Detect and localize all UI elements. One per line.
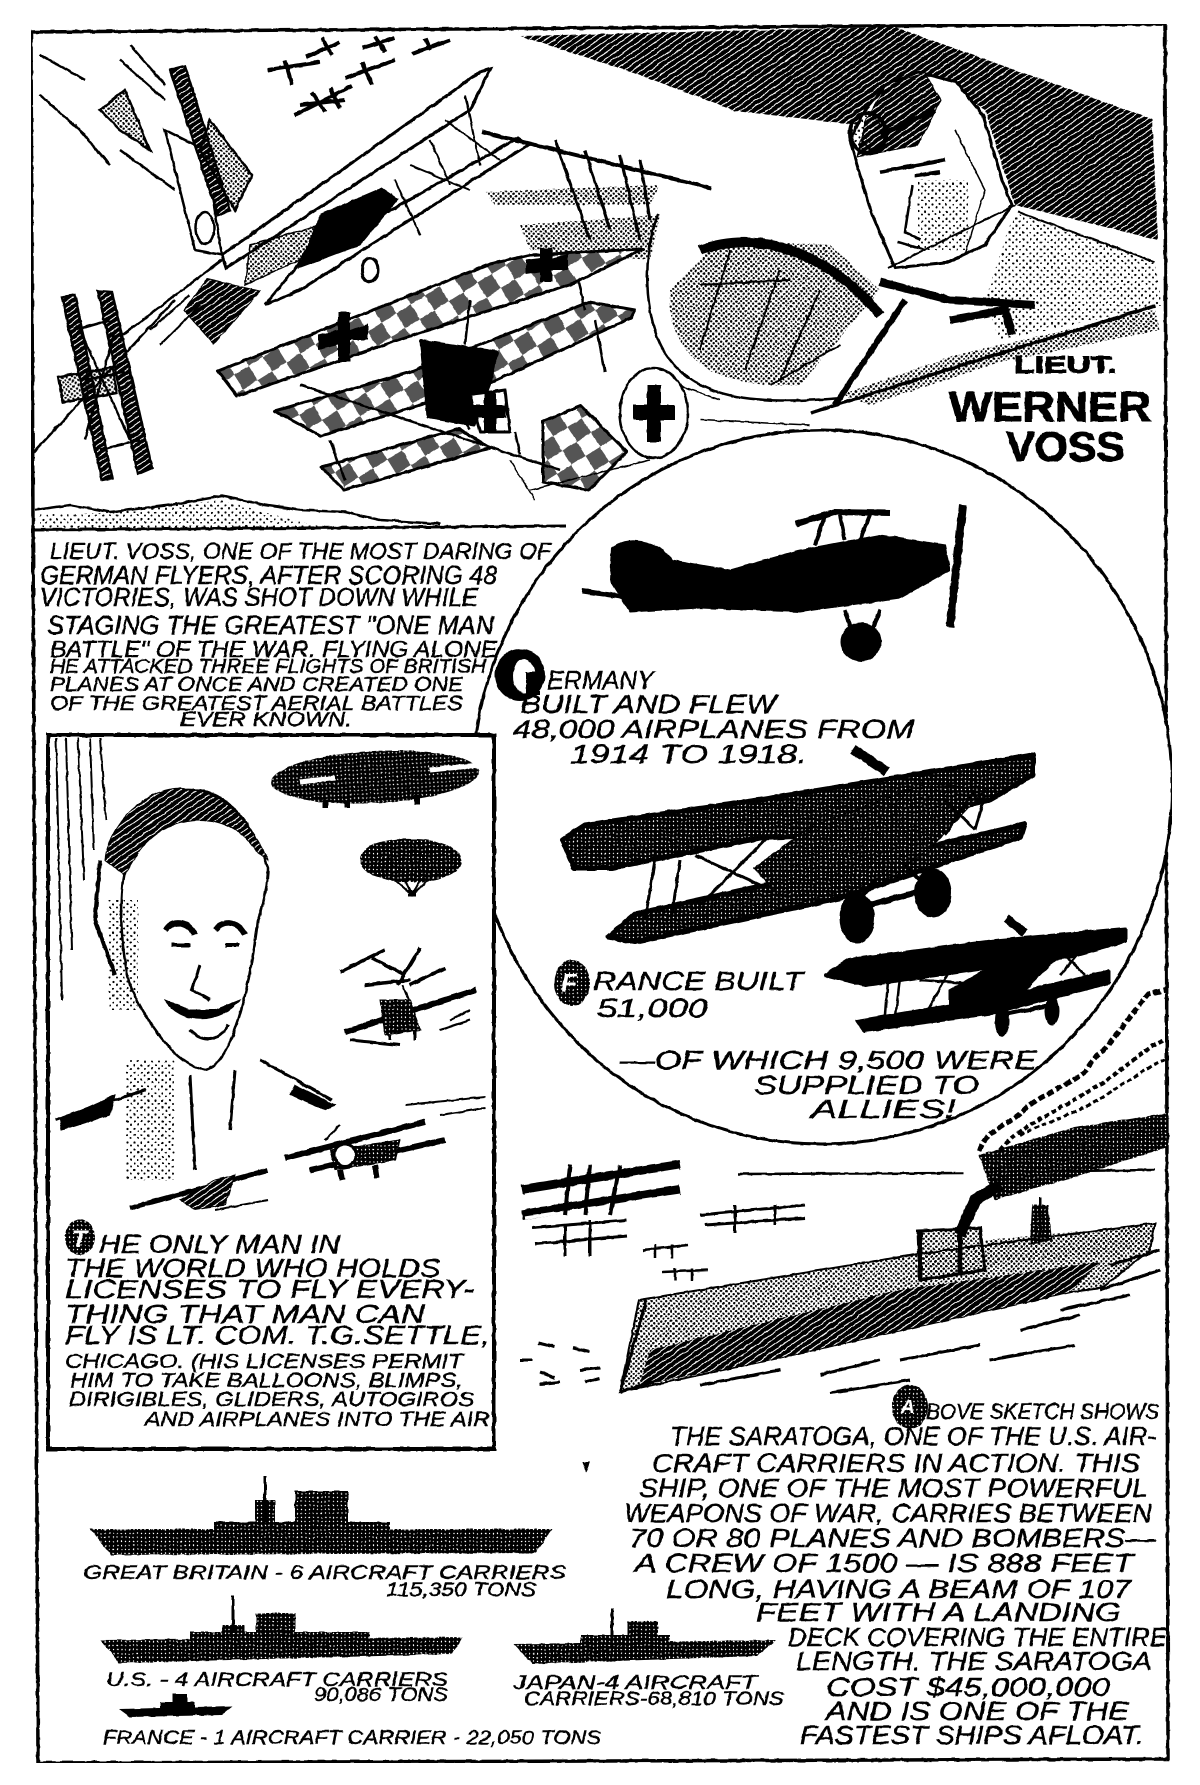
illustration: planes above carrier <box>522 1165 805 1281</box>
text block: Saratoga: COST $45,000,000 <box>826 1672 1111 1702</box>
icon: drop cap A: A <box>900 1397 915 1418</box>
text block: Saratoga: A CREW OF 1500 — IS 888 FEET <box>633 1548 1136 1578</box>
text block: Lieut. Voss biography: PLANES AT ONCE AND CREATED ONE <box>50 674 464 696</box>
horizon lines <box>738 1170 1155 1174</box>
text block: Saratoga: WEAPONS OF WAR, CARRIES BETWEEN <box>624 1498 1152 1528</box>
big circle panel <box>472 430 1172 1144</box>
text block: Germany <box>495 649 914 769</box>
title: Lieut. Werner Voss: VOSS <box>1006 423 1125 470</box>
caption: France: FRANCE - 1 AIRCRAFT CARRIER - 22,050 TONS <box>103 1728 601 1749</box>
text block: Saratoga: FEET WITH A LANDING <box>756 1597 1121 1627</box>
text block: Lieut. Voss biography: GERMAN FLYERS, AFTER SCORING 48 <box>40 560 498 590</box>
text block: Saratoga: LONG, HAVING A BEAM OF 107 <box>666 1574 1133 1604</box>
caption: Great Britain: 115,350 TONS <box>386 1580 536 1601</box>
text block: Lieut. Voss biography <box>40 538 553 731</box>
text block: France: RANCE BUILT <box>593 966 806 996</box>
text block: Saratoga: THE SARATOGA, ONE OF THE U.S. AIR- <box>670 1421 1156 1451</box>
text block: Saratoga: AND IS ONE OF THE <box>824 1696 1130 1726</box>
illustration: curtain <box>56 738 106 1000</box>
text block: France <box>554 960 1038 1124</box>
text block: Settle <box>65 1219 490 1431</box>
title: Lieut. Werner Voss <box>949 352 1151 470</box>
panel: Settle <box>48 735 494 1449</box>
illustration: large diving biplane <box>150 69 711 345</box>
text block: Lieut. Voss biography: HE ATTACKED THREE FLIGHTS OF BRITISH <box>50 656 487 678</box>
illustration: portrait of Settle <box>55 788 335 1180</box>
text block: Settle: THE WORLD WHO HOLDS <box>65 1253 441 1283</box>
silhouette: plane 3 <box>826 918 1125 1036</box>
text block: Saratoga <box>624 1385 1168 1750</box>
text block: Lieut. Voss biography: EVER KNOWN. <box>180 709 352 731</box>
icon: iron cross rudder <box>620 368 688 458</box>
ship silhouette: Great Britain <box>90 1476 552 1555</box>
illustration: mini plane formation <box>268 36 450 115</box>
mark: speck <box>582 1462 590 1472</box>
icon: drop cap A <box>892 1385 928 1429</box>
illustration: blimp <box>270 746 480 808</box>
text block: Settle: AND AIRPLANES INTO THE AIR <box>144 1409 490 1431</box>
illustration: upper left diving plane <box>40 45 252 255</box>
icon: drop cap T: T <box>72 1226 89 1253</box>
text block: Lieut. Voss biography: BATTLE" OF THE WAR. FLYING ALONE <box>50 636 498 662</box>
title: Lieut. Werner Voss: LIEUT. <box>1014 352 1117 379</box>
caption: U.S.: 90,086 TONS <box>314 1685 448 1706</box>
illustration: pilot Werner Voss <box>811 72 1162 413</box>
text block: France: ALLIES! <box>808 1094 956 1124</box>
illustration: wing crosses <box>318 248 568 432</box>
illustration: left vertical biplane <box>34 260 222 480</box>
caption: Japan <box>512 1673 784 1710</box>
illustration: low flying plane <box>130 1170 268 1210</box>
text block: Lieut. Voss biography: STAGING THE GREATEST "ONE MAN <box>47 610 494 640</box>
caption: Great Britain: GREAT BRITAIN - 6 AIRCRAFT CARRIERS <box>83 1563 566 1584</box>
illustration: hills on horizon <box>31 496 566 530</box>
icon: drop cap T <box>65 1219 95 1255</box>
text block: Germany: 1914 TO 1918. <box>570 739 807 769</box>
illustration: balloon <box>360 839 462 896</box>
illustration: wake and waves <box>520 1250 1160 1393</box>
caption: Japan: JAPAN-4 AIRCRAFT <box>512 1673 759 1694</box>
text block: Germany: 48,000 AIRPLANES FROM <box>513 714 914 744</box>
text block: France: —OF WHICH 9,500 WERE <box>619 1045 1038 1075</box>
text block: Lieut. Voss biography: LIEUT. VOSS, ONE OF THE MOST DARING OF <box>50 538 553 564</box>
illustration: aircraft carrier Saratoga <box>620 1197 1155 1392</box>
text block: Lieut. Voss biography: VICTORIES, WAS SHOT DOWN WHILE <box>40 582 479 612</box>
illustration: gray aircraft sketch behind triplane <box>485 140 660 260</box>
caption: Japan: CARRIERS-68,810 TONS <box>524 1689 784 1710</box>
illustration: windshield <box>647 214 880 401</box>
icon: drop cap F <box>554 960 590 1006</box>
text block: Saratoga: CRAFT CARRIERS IN ACTION. THIS <box>652 1448 1141 1478</box>
illustration: dark sky behind pilot <box>520 27 1158 240</box>
text block: Settle: FLY IS LT. COM. T.G.SETTLE, <box>65 1320 490 1350</box>
text block: Settle: HIM TO TAKE BALLOONS, BLIMPS, <box>70 1370 463 1392</box>
ship silhouette: U.S. <box>101 1595 463 1663</box>
text block: Lieut. Voss biography: OF THE GREATEST AERIAL BATTLES <box>50 693 464 715</box>
icon: drop cap G <box>495 649 545 701</box>
text block: Settle: DIRIGIBLES, GLIDERS, AUTOGIROS <box>69 1389 475 1411</box>
text block: Settle: LICENSES TO FLY EVERY- <box>65 1274 474 1304</box>
illustration: small biplane <box>285 1097 485 1180</box>
illustration: checkered triplane <box>218 248 810 500</box>
text block: Settle: THING THAT MAN CAN <box>65 1299 425 1329</box>
illustration: smoke <box>960 990 1168 1235</box>
title: Lieut. Werner Voss: WERNER <box>949 383 1151 430</box>
text block: Settle: CHICAGO. (HIS LICENSES PERMIT <box>65 1351 465 1373</box>
text block: Germany: BUILT AND FLEW <box>520 689 779 719</box>
text block: Saratoga: FASTEST SHIPS AFLOAT. <box>800 1720 1144 1750</box>
text block: Saratoga: BOVE SKETCH SHOWS <box>926 1399 1159 1424</box>
caption: U.S.: U.S. - 4 AIRCRAFT CARRIERS <box>106 1670 448 1691</box>
silhouette: plane 1 <box>582 505 963 661</box>
text block: Germany: ERMANY <box>547 665 656 695</box>
text block: Saratoga: 70 OR 80 PLANES AND BOMBERS— <box>629 1523 1157 1553</box>
caption: Great Britain <box>83 1563 566 1601</box>
icon: drop cap F: F <box>561 968 578 998</box>
text block: Saratoga: DECK COVERING THE ENTIRE <box>788 1622 1168 1652</box>
text block: Settle: HE ONLY MAN IN <box>99 1229 340 1259</box>
silhouette: plane 2 <box>562 749 1033 943</box>
text block: France: 51,000 <box>597 993 709 1023</box>
text block: Saratoga: LENGTH. THE SARATOGA <box>796 1646 1152 1676</box>
ship silhouette: Japan <box>514 1608 776 1664</box>
text block: France: SUPPLIED TO <box>754 1070 979 1100</box>
ship silhouette: France <box>119 1694 233 1717</box>
illustration: autogiro <box>340 948 476 1045</box>
caption: U.S. <box>106 1670 448 1706</box>
text block: Saratoga: SHIP, ONE OF THE MOST POWERFUL <box>639 1473 1148 1503</box>
